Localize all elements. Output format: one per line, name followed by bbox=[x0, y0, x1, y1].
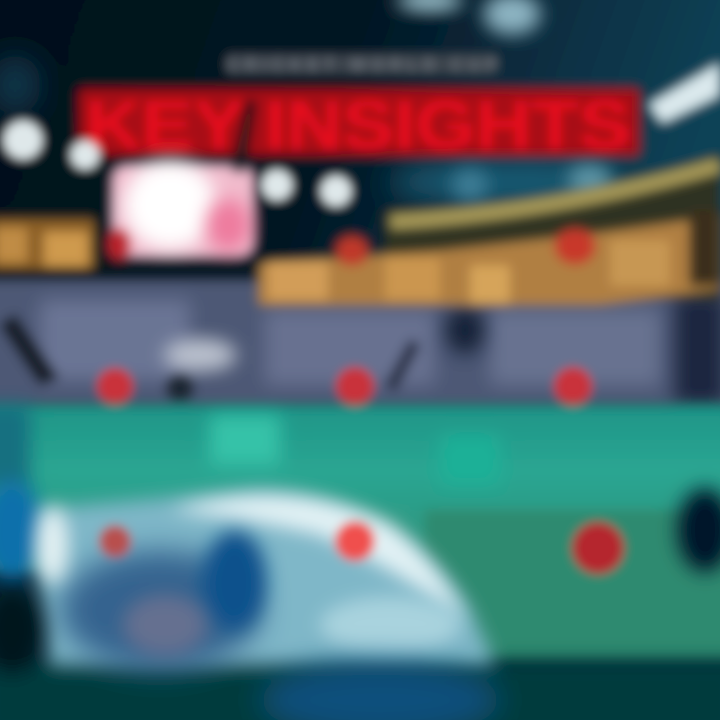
icon: white circle markers bbox=[4, 121, 351, 206]
panel: white and pink highlight bbox=[106, 100, 255, 261]
icon: lower row red markers bbox=[99, 521, 624, 574]
panel: teal band bbox=[0, 405, 720, 570]
panel: left orange strip bbox=[0, 218, 95, 270]
subtitle: CRICKET WORLD CUP bbox=[227, 55, 497, 74]
panel: blue and white wave bbox=[0, 480, 720, 720]
panel: lower green area bbox=[0, 510, 720, 720]
background: dark header area bbox=[0, 0, 720, 300]
icon: upper row red markers bbox=[97, 367, 592, 405]
panel: right golden curved band bbox=[258, 155, 720, 305]
panel: grey-blue middle band bbox=[0, 280, 720, 405]
title: key insights banner: KEY INSIGHTS bbox=[86, 87, 630, 163]
